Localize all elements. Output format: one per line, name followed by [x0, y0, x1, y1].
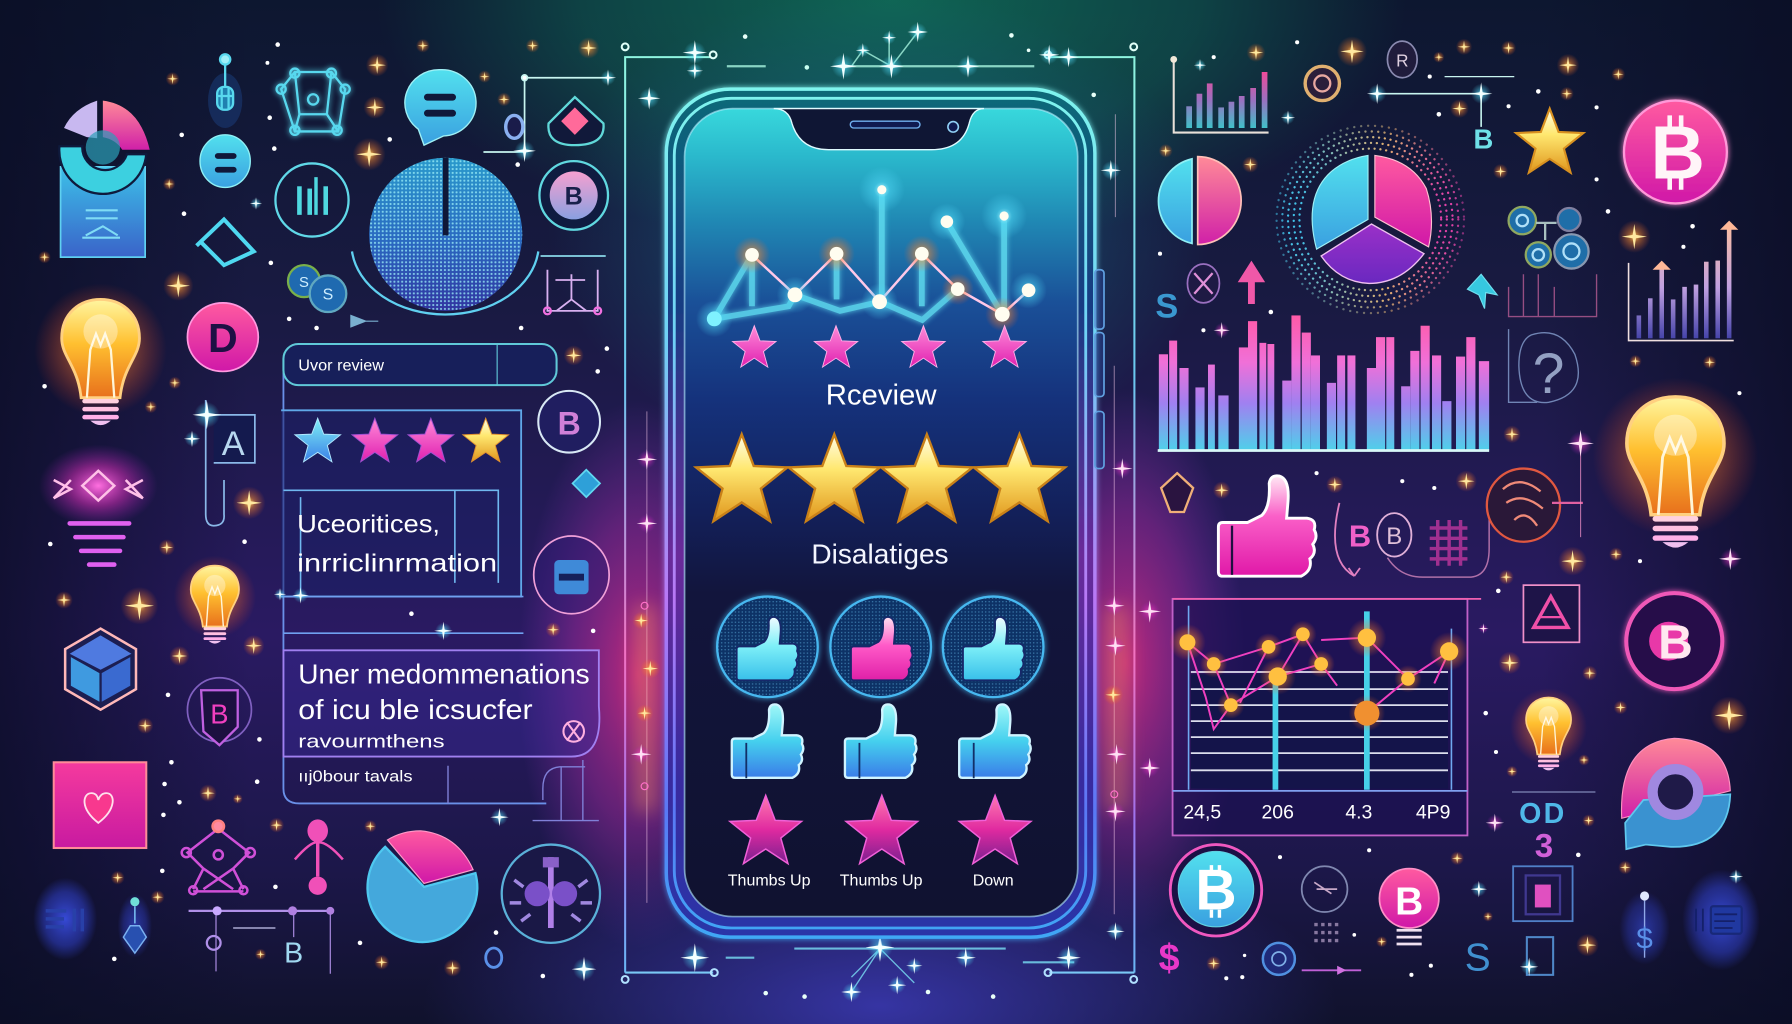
information text	[297, 511, 497, 577]
round thumbs buttons	[717, 597, 1043, 697]
panel frame	[1173, 599, 1467, 835]
left arrow	[351, 315, 378, 327]
large bar chart	[1158, 315, 1489, 452]
phone	[666, 89, 1104, 937]
left icon: heart square	[54, 762, 146, 848]
phone side buttons	[1095, 270, 1104, 469]
review panel	[281, 344, 599, 821]
right text: OD 3	[1512, 792, 1595, 865]
left network line	[189, 906, 334, 974]
left icon: B ring	[539, 161, 608, 230]
right text: OD 3: 3	[1535, 828, 1553, 865]
left icon: pie	[368, 831, 477, 942]
left icon: chat bubble	[405, 70, 476, 145]
right icon: coins top	[1305, 41, 1417, 101]
recommendations text	[298, 658, 590, 751]
right icon: glowing dollar pin	[1619, 891, 1670, 965]
right icon: B ring	[1626, 593, 1722, 689]
magenta stars row	[730, 795, 1031, 864]
left icon: B shield	[187, 678, 251, 745]
gold rating stars	[696, 434, 1065, 521]
right icon: coins top: R	[1396, 50, 1408, 70]
information text: Uceoritices,	[297, 511, 440, 539]
right large pie with dot halo	[1277, 126, 1464, 313]
left icon: B ring: B	[565, 183, 583, 211]
right icon: swirl and arrow	[1263, 943, 1361, 975]
heading: disalatiges: Disalatiges	[811, 538, 949, 569]
right icon: glowing box	[1682, 870, 1760, 970]
bottom constellation	[680, 933, 1081, 1002]
left dotted pie	[352, 158, 606, 314]
glowing line chart	[696, 167, 1047, 337]
panel baseline	[1173, 790, 1467, 792]
right sparkle: cross	[1567, 430, 1594, 537]
recommendations text: Uner medommenations	[298, 658, 590, 689]
right small bar chart	[1170, 56, 1269, 133]
inner information box	[283, 490, 498, 594]
right icon: chat pie	[1622, 738, 1730, 849]
left icon: dark emblem	[502, 845, 600, 943]
left icon: pink diamond shield	[548, 97, 604, 145]
right icon: orange brain	[1487, 469, 1583, 542]
left icon: small bulb	[174, 556, 256, 644]
right icon: dark coin	[1302, 866, 1347, 941]
left icon: B badge: B	[558, 405, 581, 441]
thumbs labels: Down	[973, 873, 1014, 890]
thumbs up row	[732, 704, 1031, 778]
left icon: coins: S	[299, 275, 309, 291]
right icon: small bulb	[1510, 688, 1587, 770]
right icon: pentagon	[1161, 473, 1193, 512]
right icon: bitcoin pink: B	[1650, 110, 1705, 194]
grid lines	[1191, 672, 1448, 770]
axis labels: 4P9	[1416, 801, 1450, 823]
right icon: A triangle box	[1523, 585, 1579, 642]
right icon: framed square	[1513, 866, 1573, 921]
phone screen	[685, 109, 1078, 917]
recommendations pill	[283, 650, 599, 757]
user review pill: Uvor review	[298, 357, 385, 374]
axis labels	[1183, 801, 1450, 823]
rating box	[281, 410, 521, 597]
right icons: B pair and grid: B	[1386, 523, 1402, 550]
orange nodes	[1169, 618, 1469, 731]
left icon: tripod frame	[544, 270, 601, 314]
left network line: B	[284, 937, 303, 969]
right icons: arrow and X	[1187, 261, 1265, 304]
right half pie	[1158, 157, 1241, 245]
right icon: B ring: B	[1658, 616, 1693, 669]
pink lines	[1187, 634, 1449, 729]
left icon: pink pin	[295, 819, 343, 895]
right icon: S knot: S	[1465, 936, 1491, 979]
frame around phone	[622, 43, 1137, 983]
footnote text: ııj0bour tavals	[298, 769, 413, 786]
right icons: B pair and grid: B	[1349, 518, 1371, 553]
left icon: network	[277, 69, 350, 135]
left icon: pin	[208, 54, 242, 128]
side sparkle columns	[631, 114, 1133, 941]
right icon: bitcoin bulb	[1379, 869, 1439, 944]
thumbs labels	[728, 873, 1014, 890]
top constellation	[638, 22, 1121, 181]
left icon: blue pin	[118, 894, 152, 958]
left icon: B badge	[538, 391, 600, 453]
right sparkle connector	[1377, 77, 1514, 155]
thumbs labels: Thumbs Up	[840, 873, 923, 890]
phone notch	[774, 109, 984, 150]
right gold star	[1516, 109, 1583, 173]
right sparkle connector: B	[1474, 124, 1493, 155]
left icon: B shield: B	[210, 698, 229, 729]
left sparkles	[38, 37, 616, 981]
pink stars row	[733, 326, 1026, 367]
left icon: pink lotus lamp	[39, 445, 158, 567]
heading: review: Rceview	[826, 380, 937, 412]
right bar chart with arrows	[1629, 221, 1738, 341]
left icon: small diamond	[573, 470, 600, 497]
user review pill	[283, 344, 557, 385]
right icon: bitcoin bulb: B	[1395, 880, 1423, 923]
right icon: outline box	[1527, 937, 1553, 975]
right icon: pink thumb	[1218, 476, 1316, 576]
left icon: coins: S	[323, 286, 333, 303]
right icon: bitcoin pink	[1624, 101, 1727, 203]
thumbs labels: Thumbs Up	[728, 873, 811, 890]
right text: OD 3: OD	[1519, 798, 1567, 830]
axis labels: 24,5	[1183, 801, 1221, 823]
panel plot band	[1191, 674, 1448, 789]
phone body	[666, 89, 1095, 937]
panel top highlight	[1173, 598, 1481, 600]
right icon: bitcoin blue: B	[1195, 859, 1237, 923]
left icon: equals disc	[200, 135, 250, 187]
right icon: S glyph: S	[1155, 288, 1178, 326]
left icon: storage badge	[534, 536, 609, 614]
right icon: large bulb	[1593, 378, 1758, 548]
recommendations text: ravourmthens	[298, 730, 445, 751]
review panel outline	[283, 363, 546, 803]
left icon: pie card	[59, 101, 150, 257]
left icon: large bulb	[34, 283, 167, 425]
left icon: A box: A	[222, 425, 245, 463]
left icon: D disc	[187, 303, 258, 371]
left icon: diamond arrow	[197, 219, 254, 265]
right icon: glowing dollar pin: $	[1636, 923, 1653, 956]
panel small icon	[563, 721, 584, 742]
axis labels: 206	[1262, 801, 1294, 823]
axis labels: 4.3	[1345, 801, 1372, 823]
right icons: coin cluster	[1509, 207, 1589, 269]
divider lines	[281, 597, 523, 633]
right icon: cyan arrow	[1467, 274, 1497, 309]
information text: inrriclinrmation	[297, 549, 497, 577]
right icons: B pair and grid	[1335, 503, 1489, 577]
right faded frame	[1509, 274, 1597, 317]
recommendations text: of icu ble icsucfer	[298, 694, 533, 725]
left icon: D disc: D	[208, 315, 238, 361]
phone inner rim	[674, 98, 1086, 928]
right icon: pink dollar: $	[1159, 936, 1180, 978]
left icon: cube	[65, 629, 136, 710]
left icon: blue glow box	[33, 878, 97, 960]
panel hook detail	[448, 760, 599, 821]
left connector lines	[483, 75, 608, 152]
left ring	[486, 948, 502, 967]
cyan verticals	[1189, 606, 1451, 790]
right sparkles	[1138, 36, 1748, 980]
left icon: magenta robot	[182, 821, 255, 894]
left icon: coins	[288, 265, 346, 312]
left icon: A box	[206, 400, 255, 526]
line chart panel	[1169, 599, 1481, 835]
left icon: bars in circle	[275, 163, 349, 237]
right question circle: ?	[1533, 342, 1564, 406]
right question circle	[1509, 329, 1578, 406]
right icon: bitcoin blue	[1170, 845, 1262, 936]
